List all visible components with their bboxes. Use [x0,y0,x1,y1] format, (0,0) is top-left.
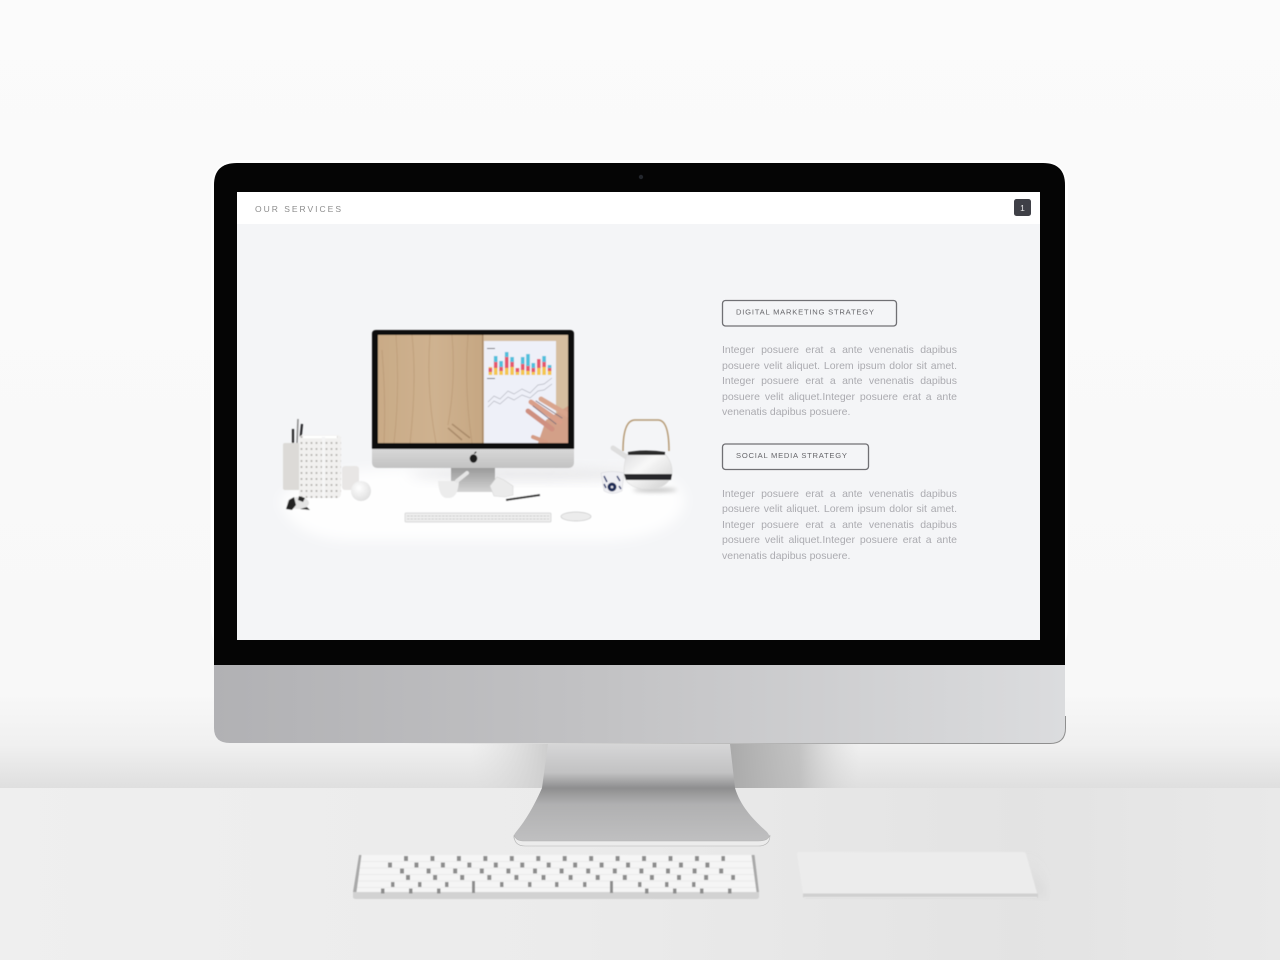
teapot spout [613,448,628,458]
teapot shadow [633,488,677,492]
chart caption marks [487,348,495,378]
trackpad surface [797,852,1037,895]
paragraph: social media: posuere velit aliquet.Integer posuere erat a ante [722,534,957,546]
illustration: desk scene [280,330,685,541]
paragraph: social media [722,488,957,562]
paragraph: social media: posuere velit aliquet. Lorem ipsum dolor sit amet. [722,503,957,515]
paragraph: social media: venenatis dapibus posuere. [722,550,850,562]
white ball [351,481,371,501]
paragraph: digital marketing: venenatis dapibus posuere. [722,406,850,418]
tag: digital marketing strategy [722,300,896,326]
teapot lid [628,450,665,455]
background: desk [0,788,1280,960]
tea cup [601,472,624,494]
stand foot rim [514,835,770,846]
pen [506,495,540,500]
slide header bar [237,192,1040,224]
teapot body [624,452,672,489]
keyboard body [353,855,759,898]
pencil cup [283,419,302,490]
trackpad [797,852,1046,898]
paragraph: digital marketing: Integer posuere erat a ante venenatis dapibus [722,375,957,387]
shadow under small monitor [410,467,650,481]
small monitor bezel [372,330,574,449]
keyboard front edge [353,892,759,899]
stand foot [514,788,769,842]
stand neck [542,744,735,788]
white desk glow [280,468,685,541]
tag: digital marketing strategy: DIGITAL MARKETING STRATEGY [736,308,874,316]
lantern [299,435,341,498]
monitor black bezel [214,163,1065,665]
wall shadow left of the stand [470,744,550,788]
trackpad edge [803,894,1038,898]
teapot handle [623,420,669,451]
tag: social media strategy [722,444,868,470]
paragraph: digital marketing [722,344,957,418]
teapot band [624,474,672,480]
monitor [211,160,1068,744]
teapot [613,420,677,492]
paragraph: digital marketing: posuere velit aliquet.Integer posuere erat a ante [722,390,957,402]
mortar and pestle [438,473,467,498]
panda figurine [286,496,310,510]
slide screen [237,192,1040,640]
webcam [639,175,643,179]
wall shadow right of the stand [725,744,860,788]
small mouse [561,512,591,521]
keyboard side edges [353,855,759,892]
chin lower edge [400,716,1066,744]
small keyboard [405,513,551,522]
paper with charts [484,341,556,443]
apple logo [470,452,477,463]
monitor stand [514,744,770,846]
monitor chin [214,660,1065,743]
large keyboard [353,855,759,899]
keyboard key gaps [381,858,735,893]
slide body [237,192,1040,640]
crumpled paper [490,477,513,497]
small monitor chin [372,445,574,468]
page number badge [1014,199,1031,216]
page number badge: 1 [1020,203,1025,213]
bar chart [488,352,551,375]
paragraph: social media: Integer posuere erat a ante venenatis dapibus [722,518,957,530]
monitor halo [211,160,1068,655]
wood wallpaper [378,335,568,443]
tag: social media strategy: SOCIAL MEDIA STRATEGY [736,451,847,460]
keyboard row lines [355,862,756,888]
paragraph: digital marketing: Integer posuere erat a ante venenatis dapibus [722,344,957,356]
hand [528,399,568,443]
paragraph: digital marketing: posuere velit aliquet. Lorem ipsum dolor sit amet. [722,360,957,372]
slide title: OUR SERVICES [255,204,341,214]
small lantern [342,466,359,490]
trackpad shadow [1026,860,1046,896]
paragraph: social media: Integer posuere erat a ante venenatis dapibus [722,488,957,500]
line chart [488,378,552,407]
small monitor stand [451,468,495,492]
